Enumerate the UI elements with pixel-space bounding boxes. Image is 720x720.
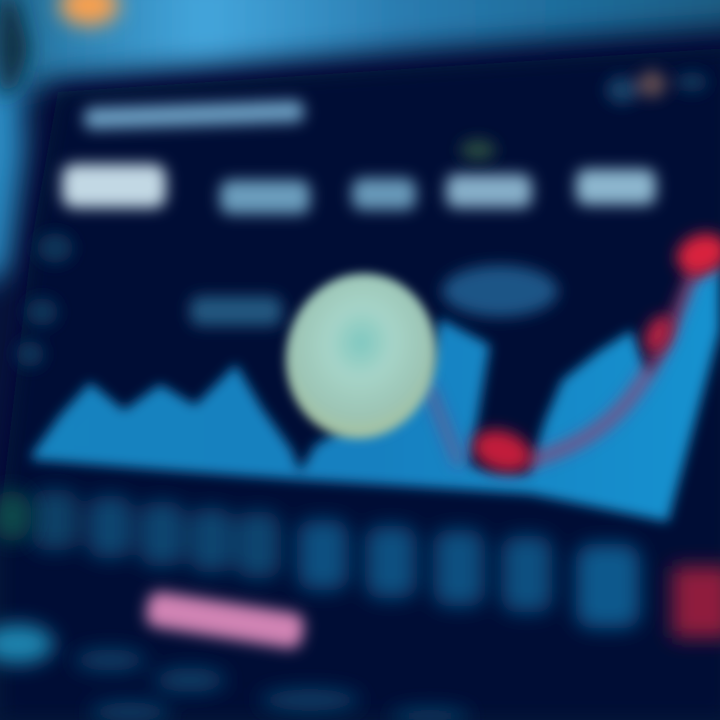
title text bar [84,100,304,130]
red marker mid [639,311,677,357]
bottom text blobs [74,649,470,720]
KPI 4 [446,174,532,208]
red trend line [428,258,700,465]
pink label [144,590,306,650]
red tile right [672,566,720,638]
orange light [59,0,119,26]
green accent left [0,490,32,542]
bottom bars row [32,490,640,628]
area chart [32,262,720,522]
bottom-left teal label [0,624,54,664]
KPI 4 accent [460,139,496,161]
top-right indicators [606,70,708,104]
KPI row [62,139,656,214]
KPI 3 [352,178,416,210]
coin icon [270,259,452,453]
top blue backdrop band [0,0,720,110]
dark left bezel [0,0,28,100]
left axis labels [16,233,73,367]
left blue edge glow [0,70,24,290]
KPI 1 [62,164,166,208]
red marker high [671,226,720,282]
KPI 2 [220,180,310,214]
KPI 5 [576,169,656,205]
chart label left [190,296,282,326]
red marker low [467,423,537,479]
chart label right [442,265,558,317]
